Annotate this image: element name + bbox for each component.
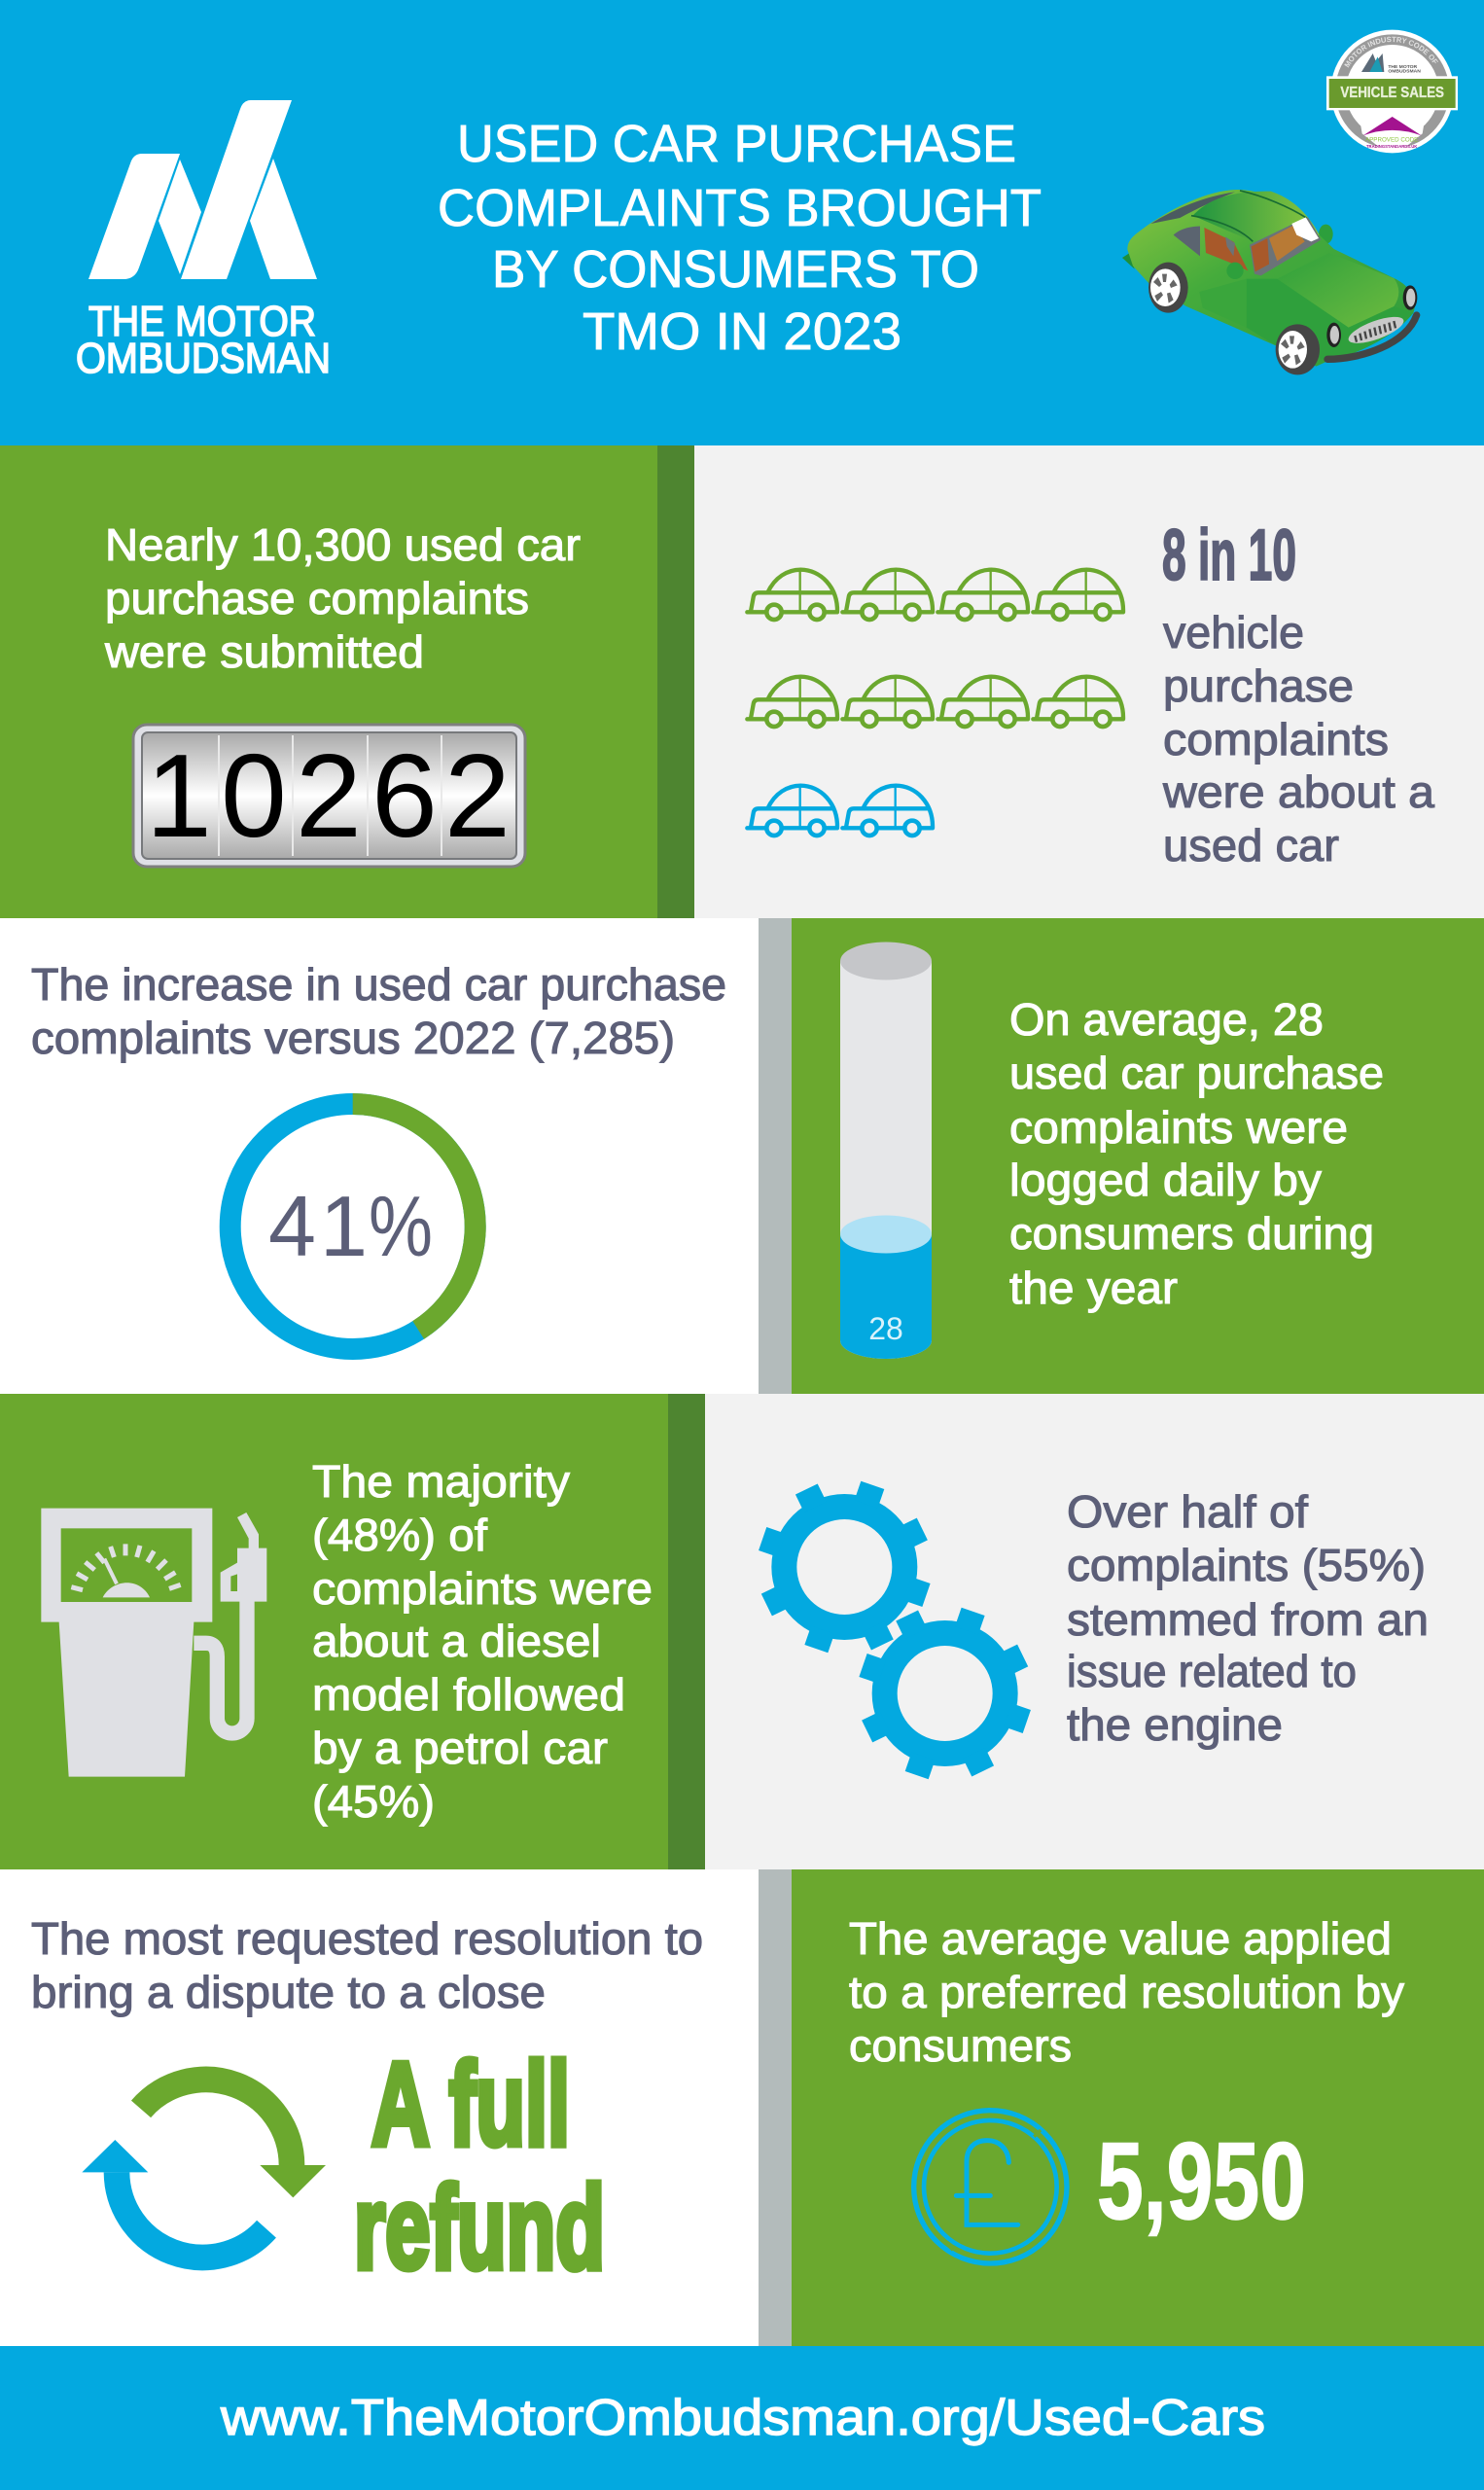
panel: 10,300 complaints xyxy=(0,445,694,918)
panel: fuel type xyxy=(0,1394,705,1869)
statistic: a full refund: A full xyxy=(371,2038,570,2170)
text: engine share: complaints (55%) xyxy=(1067,1540,1426,1590)
text: complaints submitted: Nearly 10,300 used car xyxy=(105,519,581,570)
chart: cylinder gauge xyxy=(840,942,932,1359)
chart: cylinder gauge: 28 xyxy=(868,1311,903,1346)
text: most requested resolution xyxy=(31,1913,703,2017)
donut chart: 41%: 41 xyxy=(268,1178,368,1274)
text: daily average: used car purchase xyxy=(1009,1048,1384,1098)
text: engine share: Over half of xyxy=(1067,1486,1308,1537)
title: BY CONSUMERS TO xyxy=(492,240,979,299)
text: average value: The average value applied xyxy=(849,1913,1392,1964)
pictogram: ten cars xyxy=(747,570,1123,836)
icon: fuel pump xyxy=(41,1509,266,1777)
text: diesel and petrol: complaints were xyxy=(312,1563,653,1614)
text: diesel and petrol: The majority xyxy=(312,1456,570,1507)
text: engine share: stemmed from an xyxy=(1067,1594,1429,1645)
text: increase versus 2022: The increase in used car purchase xyxy=(31,959,726,1010)
statistic: a full refund: refund xyxy=(354,2161,605,2294)
text: daily average: the year xyxy=(1009,1263,1178,1313)
icon: green car xyxy=(1122,190,1417,374)
logo: The Motor Ombudsman xyxy=(76,100,331,382)
text: diesel and petrol: (48%) of xyxy=(312,1510,487,1560)
text: daily average: logged daily by xyxy=(1009,1155,1322,1205)
text: daily average xyxy=(1009,994,1384,1313)
panel: requested resolution xyxy=(0,1869,792,2346)
panel: 8 in 10 xyxy=(694,445,1484,918)
text: complaints submitted: purchase complaints xyxy=(105,573,529,623)
text: diesel and petrol: model followed xyxy=(312,1669,625,1720)
badge: vehicle sales approved code: APPROVED CODE xyxy=(1365,137,1419,144)
text: used car share xyxy=(1162,607,1434,871)
footer: website link: www.TheMotorOmbudsman.org/Used-Cars xyxy=(220,2390,1265,2446)
text: used car share: vehicle xyxy=(1163,607,1304,658)
icon: pound coin xyxy=(914,2111,1067,2263)
text: increase versus 2022: complaints versus 2022 (7,285) xyxy=(31,1013,675,1063)
icon: refund arrows xyxy=(82,2080,326,2258)
text: average value: to a preferred resolution by xyxy=(849,1967,1404,2017)
header panel xyxy=(0,0,1484,445)
title: USED CAR PURCHASE xyxy=(457,115,1016,173)
text: average value xyxy=(849,1913,1404,2071)
badge: vehicle sales approved code xyxy=(1326,29,1458,154)
panel: 28 per day xyxy=(792,918,1484,1394)
text: engine share: issue related to xyxy=(1067,1646,1357,1696)
text: most requested resolution: The most requested resolution to xyxy=(31,1913,703,1964)
statistic: a full refund xyxy=(354,2038,605,2294)
donut chart: 41% xyxy=(230,1104,476,1349)
text: used car share: used car xyxy=(1163,820,1339,871)
badge: vehicle sales approved code: THE MOTOR xyxy=(1388,64,1418,70)
statistic: 8 in 10: 8 in 10 xyxy=(1162,515,1296,595)
text: used car share: purchase xyxy=(1163,660,1354,711)
footer: website link xyxy=(0,2346,1484,2490)
logo: The Motor Ombudsman: THE MOTOR xyxy=(88,298,316,345)
counter: 10262: 10262 xyxy=(146,729,511,862)
text: diesel and petrol: (45%) xyxy=(312,1776,435,1827)
panel: average value xyxy=(792,1869,1484,2346)
badge: vehicle sales approved code: TRADINGSTANDARDS.UK xyxy=(1366,144,1418,149)
text: complaints submitted xyxy=(104,519,581,677)
title xyxy=(438,115,1042,361)
text: diesel and petrol: by a petrol car xyxy=(312,1723,608,1773)
badge: vehicle sales approved code: VEHICLE SALES xyxy=(1340,85,1444,101)
logo: The Motor Ombudsman: OMBUDSMAN xyxy=(76,335,331,382)
text: daily average: On average, 28 xyxy=(1009,994,1324,1045)
text: increase versus 2022 xyxy=(31,959,726,1063)
text: engine share xyxy=(1067,1486,1429,1750)
text: diesel and petrol xyxy=(312,1456,653,1827)
title: TMO IN 2023 xyxy=(583,302,901,361)
title: COMPLAINTS BROUGHT xyxy=(438,179,1042,237)
panel: 41% increase xyxy=(0,918,792,1394)
text: complaints submitted: were submitted xyxy=(104,626,424,677)
text: used car share: complaints xyxy=(1163,714,1389,765)
donut chart: 41%: % xyxy=(369,1178,433,1274)
badge: vehicle sales approved code: OMBUDSMAN xyxy=(1388,69,1421,75)
panel: engine issues xyxy=(705,1394,1484,1869)
text: engine share: the engine xyxy=(1067,1699,1283,1750)
text: daily average: complaints were xyxy=(1009,1102,1348,1153)
text: daily average: consumers during xyxy=(1009,1208,1374,1259)
text: used car share: were about a xyxy=(1162,766,1434,817)
text: most requested resolution: bring a dispute to a close xyxy=(31,1967,546,2017)
icon: gears xyxy=(759,1481,1031,1779)
statistic: 5,950: 5,950 xyxy=(1097,2120,1306,2242)
text: diesel and petrol: about a diesel xyxy=(312,1616,601,1666)
text: average value: consumers xyxy=(849,2020,1072,2071)
